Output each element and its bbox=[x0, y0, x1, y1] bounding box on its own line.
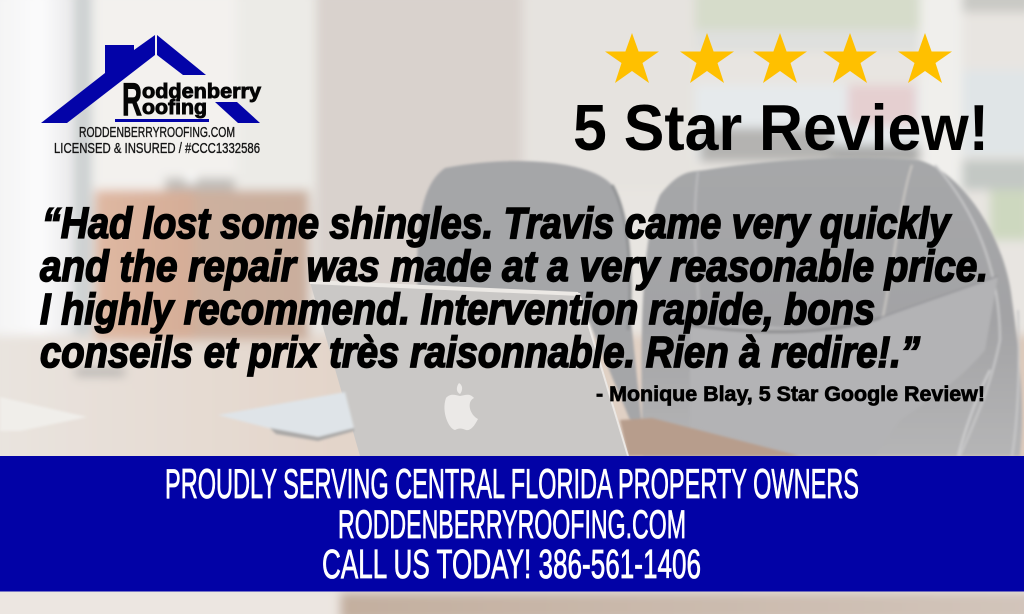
laptop bbox=[310, 280, 629, 456]
icon: apple logo bbox=[444, 383, 478, 430]
logo wordmark bbox=[122, 73, 262, 125]
review quote bbox=[40, 199, 988, 377]
review quote: conseils et prix très raisonnable. Rien à redire!.” bbox=[40, 328, 920, 377]
five star rating bbox=[605, 33, 952, 83]
heading: 5 Star Review! bbox=[573, 91, 989, 164]
icon: roof bbox=[41, 35, 260, 123]
papers on table bbox=[0, 392, 354, 441]
logo wordmark: oddenberry bbox=[142, 81, 262, 103]
wood table edge right of laptop bbox=[620, 418, 800, 456]
logo website: RODDENBERRYROOFING.COM bbox=[79, 125, 235, 141]
banner line: website: RODDENBERRYROOFING.COM bbox=[338, 503, 686, 547]
logo bbox=[41, 35, 262, 157]
logo license: LICENSED & INSURED / #CCC1332586 bbox=[54, 140, 260, 157]
review quote: I highly recommend. Intervention rapide, bons bbox=[40, 285, 875, 334]
review attribution: - Monique Blay, 5 Star Google Review! bbox=[596, 383, 985, 406]
chairs bbox=[417, 158, 1022, 456]
logo wordmark: R bbox=[122, 73, 142, 125]
banner line: phone: CALL US TODAY! 386-561-1406 bbox=[322, 541, 701, 587]
banner: contact bbox=[0, 456, 1024, 592]
logo wordmark: oofing bbox=[142, 97, 207, 119]
